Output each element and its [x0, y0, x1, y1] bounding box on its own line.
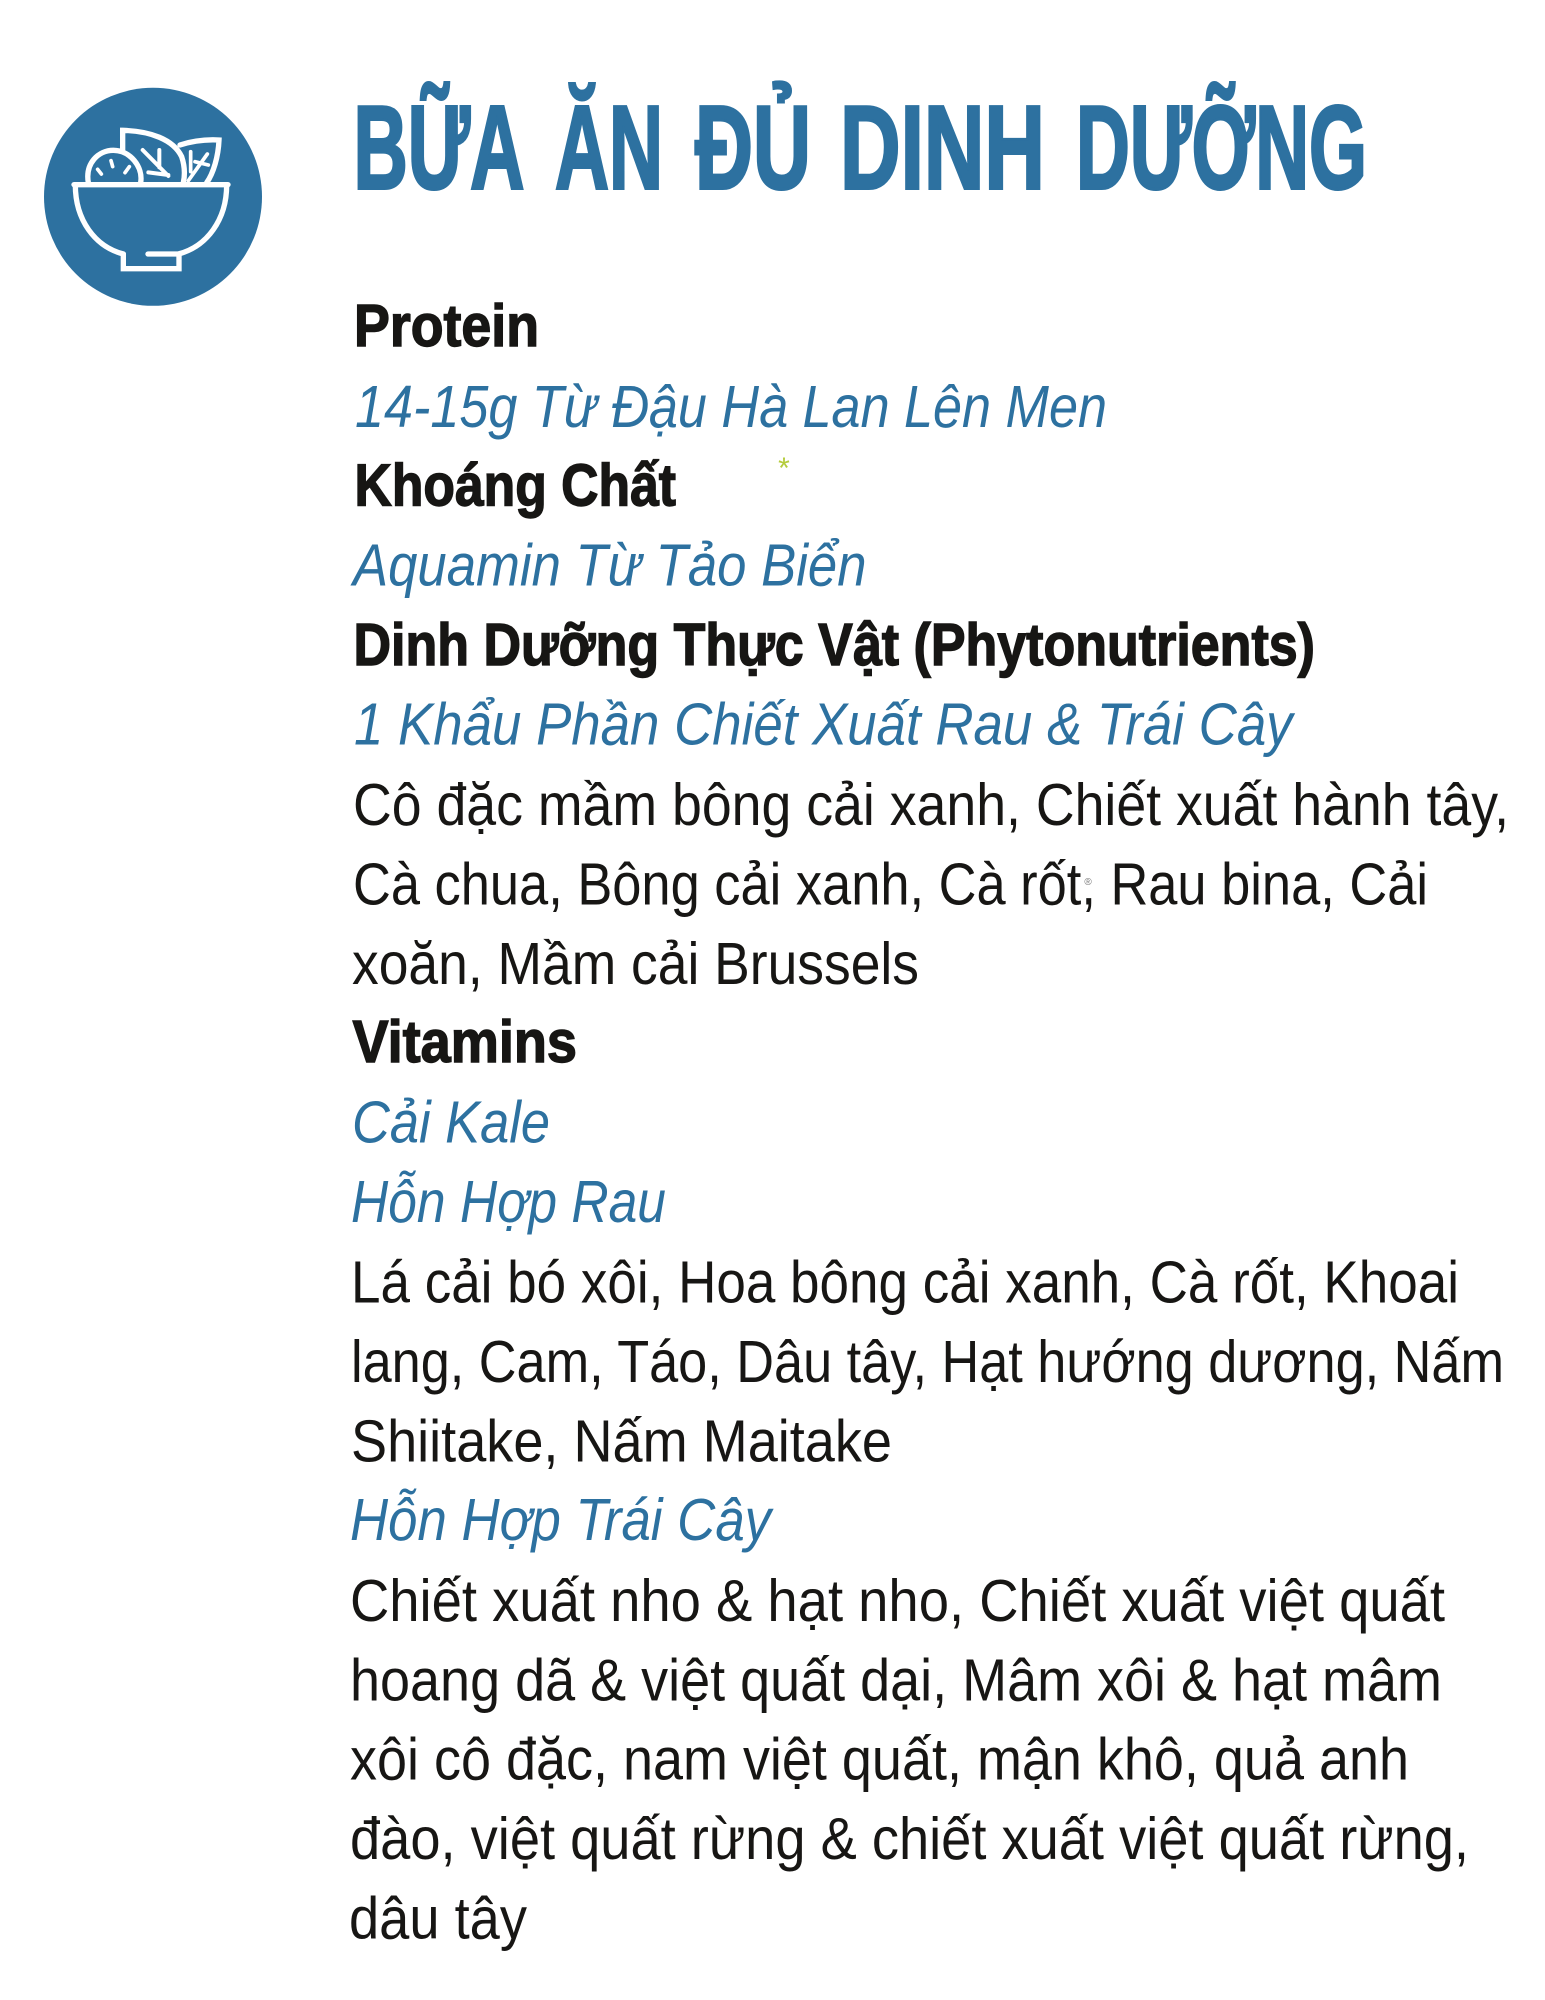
heading: phytonutrients: Dinh Dưỡng Thực Vật (Phytonutrients)	[354, 612, 1315, 678]
vitamins: kale: Cải Kale	[352, 1090, 550, 1156]
fruit blend line 5: dâu tây	[349, 1886, 527, 1952]
protein source: 14-15g Từ Đậu Hà Lan Lên Men	[355, 374, 1107, 440]
green asterisk mark: *	[778, 452, 790, 485]
title	[354, 82, 1367, 215]
title: DINH	[840, 82, 1045, 215]
icon: salad bowl in blue circle	[44, 88, 262, 306]
fruit blend line 1: Chiết xuất nho & hạt nho, Chiết xuất việt quất	[350, 1568, 1445, 1634]
fruit blend line 3: xôi cô đặc, nam việt quất, mận khô, quả anh	[350, 1726, 1409, 1792]
phytonutrients line 2: Cà chua, Bông cải xanh, Cà rốt, Rau bina, Cải	[353, 852, 1428, 918]
phytonutrients serving: 1 Khẩu Phần Chiết Xuất Rau & Trái Cây	[354, 692, 1296, 758]
heading: vitamins: Vitamins	[352, 1009, 577, 1075]
nutrition text block	[349, 293, 1509, 1952]
vitamins: vegetable blend heading: Hỗn Hợp Rau	[351, 1169, 666, 1235]
vitamins: fruit blend heading: Hỗn Hợp Trái Cây	[350, 1487, 774, 1553]
heading: minerals: Khoáng Chất	[354, 452, 676, 518]
fruit blend line 2: hoang dã & việt quất dại, Mâm xôi & hạt mâm	[350, 1648, 1442, 1714]
fruit blend line 4: đào, việt quất rừng & chiết xuất việt quất rừng,	[350, 1806, 1469, 1872]
title: BỮA	[354, 82, 524, 215]
registered mark: ®	[1084, 877, 1092, 888]
heading: protein: Protein	[354, 293, 539, 359]
minerals source: Aquamin Từ Tảo Biển	[350, 532, 866, 598]
vegetable blend line 3: Shiitake, Nấm Maitake	[351, 1408, 892, 1474]
title: DƯỠNG	[1076, 82, 1367, 215]
title: ĂN	[555, 82, 663, 215]
title: ĐỦ	[695, 82, 811, 215]
phytonutrients line 3: xoăn, Mầm cải Brussels	[352, 931, 919, 997]
